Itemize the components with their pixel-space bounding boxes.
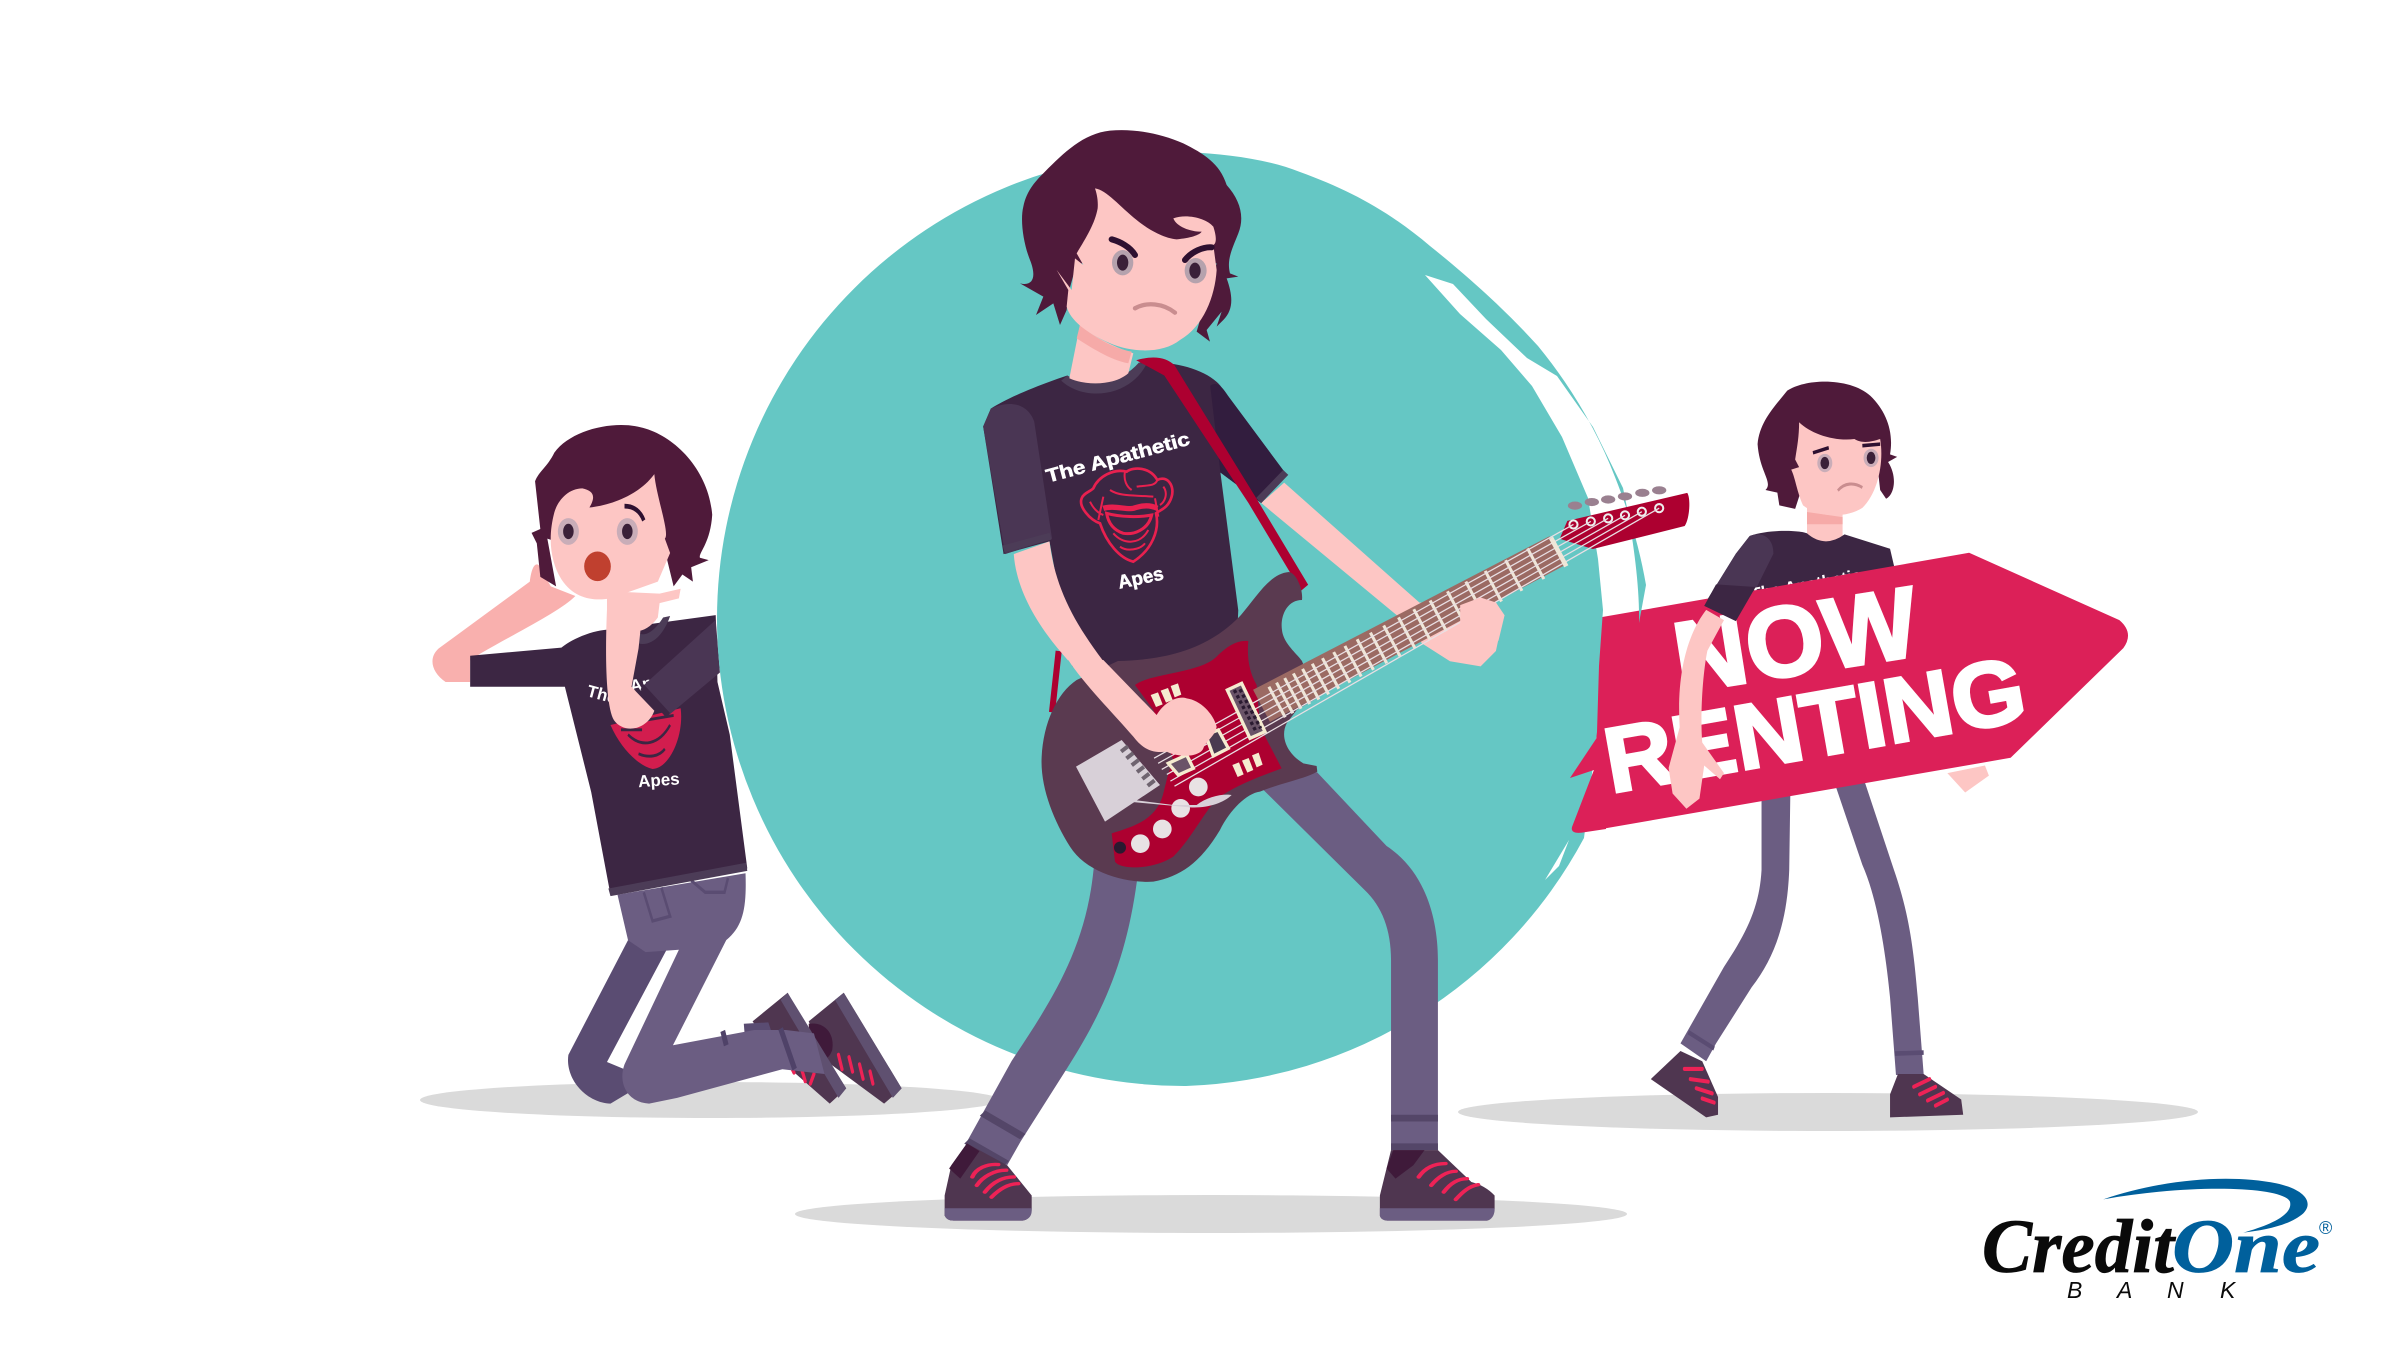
pickup: neck [1227, 683, 1265, 738]
pickup: bridge [1168, 755, 1193, 775]
cream switches lower [1232, 753, 1263, 777]
left ankle [949, 1143, 979, 1179]
sleeve cuff [1704, 584, 1756, 621]
tuning pegs [1568, 486, 1666, 510]
head [1020, 130, 1241, 383]
monkey mouth [1107, 513, 1152, 534]
near arm over sign [1669, 610, 1724, 809]
back shoe [753, 993, 846, 1104]
sign spike [1570, 730, 1602, 778]
pickguard [1112, 641, 1282, 867]
logo word: One: One [2172, 1205, 2320, 1289]
band monkey print [610, 708, 681, 769]
eyes [1112, 250, 1133, 275]
front leg jeans [617, 873, 824, 1104]
left shoe [1651, 1051, 1718, 1117]
left sole [945, 1208, 1032, 1221]
hand on chin [607, 589, 681, 631]
fretboard [1253, 536, 1565, 722]
face [1057, 188, 1217, 350]
sign lower-left corner over circle [1572, 762, 1606, 833]
sleeve cuffs [1004, 472, 1286, 549]
ground shadow: left figure [420, 1082, 1000, 1118]
pickup: middle [1206, 730, 1228, 756]
monkey outline [1081, 469, 1172, 562]
brows [1112, 239, 1212, 260]
neck [1807, 505, 1843, 544]
character: kneeling fan, left [432, 425, 902, 1104]
sleeve [1704, 534, 1773, 620]
face [1791, 422, 1881, 515]
pockets [644, 878, 728, 921]
teal brush circle [717, 152, 1646, 1086]
tremolo arm [1128, 795, 1232, 807]
monkey linework [621, 715, 674, 756]
back strap [1052, 651, 1059, 712]
jack [1114, 842, 1126, 854]
frets [1269, 548, 1544, 717]
monkey wrinkles [1090, 472, 1166, 550]
right sole [1380, 1208, 1495, 1221]
eyes [1817, 454, 1832, 472]
shirt text: band name: The Apathetic [1044, 428, 1192, 487]
shirt text hidden behind sign: The Apathetic [1749, 566, 1863, 604]
collar [1061, 363, 1146, 394]
picking hand [1068, 660, 1217, 756]
logo swoosh [2103, 1179, 2308, 1233]
nut [1551, 538, 1566, 566]
sign text: NOW: NOW [1666, 566, 1926, 715]
right sleeve [1210, 384, 1287, 503]
cuff bands [1688, 1032, 1924, 1054]
laces [1684, 1069, 1947, 1106]
neck [1069, 325, 1133, 383]
open mouth [584, 552, 611, 581]
ground shadow: right figure [1458, 1093, 2198, 1131]
back leg jeans [568, 940, 667, 1104]
fretting fingers [1460, 597, 1505, 641]
strings [1154, 508, 1659, 786]
shoe soles [781, 993, 902, 1098]
logo word: BANK: BANK [2067, 1277, 2237, 1303]
collar [633, 616, 670, 644]
bridge plate [1076, 740, 1160, 822]
character: guitarist, centre [945, 130, 1689, 1221]
face [551, 474, 670, 599]
arrow sign board [1572, 553, 2128, 832]
cuff bands [723, 1029, 795, 1069]
right laces [1419, 1164, 1478, 1199]
eyes [558, 518, 579, 545]
mouth [1135, 304, 1175, 313]
right leg [1835, 781, 1924, 1075]
picking forearm [1014, 541, 1103, 661]
strap [1136, 358, 1308, 591]
right leg [1261, 772, 1438, 1150]
left sleeve [983, 404, 1052, 554]
brush streak [1545, 840, 1569, 880]
shirt text: Apes: Apes [637, 769, 680, 791]
hair [532, 425, 712, 586]
right ankle [1387, 1150, 1425, 1179]
left leg [1680, 788, 1790, 1061]
electric guitar [1014, 486, 1689, 882]
pickup: neck pole pieces [1234, 689, 1261, 733]
far lower leg [744, 1022, 774, 1045]
cream switches upper [1151, 683, 1181, 707]
sleeve cuff [642, 687, 668, 715]
shirt text: Apathetic: Apathetic [628, 664, 708, 696]
socks [809, 1023, 833, 1060]
t-shirt hem [608, 863, 747, 896]
sign text: RENTING: RENTING [1597, 638, 2033, 813]
monkey print [1081, 469, 1172, 562]
left shoe [945, 1143, 1032, 1221]
brows [1813, 444, 1880, 453]
monkey brow band [1103, 506, 1157, 509]
back arm [432, 564, 575, 682]
legs and shoes [945, 772, 1495, 1221]
character: sign holder, right [1572, 382, 2128, 1117]
left leg [967, 812, 1143, 1165]
logo: Credit One Bank [1982, 1179, 2332, 1303]
shirt text: Apes: Apes [1116, 563, 1165, 593]
t-shirt [983, 362, 1287, 666]
tuner posts [1569, 504, 1663, 529]
right arm [1261, 483, 1504, 666]
shirt text: The: The [585, 682, 619, 708]
mouth [1838, 484, 1862, 491]
logo word: Credit: Credit [1982, 1205, 2177, 1289]
logo registered mark: ® [2319, 1218, 2332, 1238]
front shoe [809, 993, 902, 1104]
front arm [606, 610, 654, 729]
guitar body [1042, 572, 1317, 882]
t-shirt [1704, 531, 1895, 625]
ground shadow: centre figure [795, 1195, 1627, 1233]
control knobs [1131, 778, 1208, 853]
hair [1758, 382, 1897, 509]
far hand [1947, 765, 1989, 792]
cuff bands [967, 1113, 1438, 1164]
t-shirt [470, 615, 747, 895]
laces [791, 1055, 873, 1084]
headstock [1560, 493, 1689, 549]
right shoe [1890, 1074, 1963, 1117]
brow [625, 506, 644, 520]
right shoe [1380, 1150, 1495, 1221]
sleeve [642, 620, 720, 715]
hair [1020, 130, 1241, 342]
neck shadow [1077, 325, 1132, 363]
neck shadow [1807, 512, 1843, 524]
saddles [1123, 747, 1153, 786]
left laces [972, 1164, 1018, 1197]
